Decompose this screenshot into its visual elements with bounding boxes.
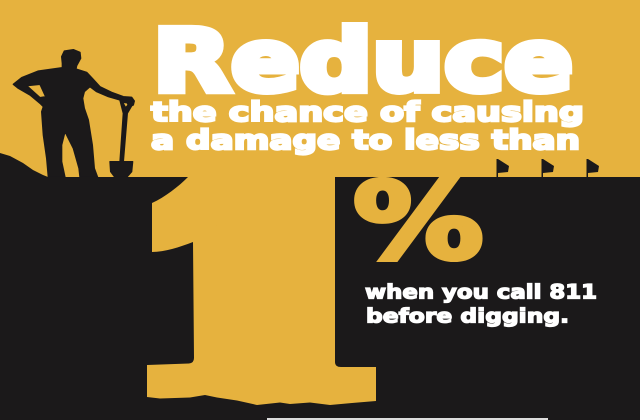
flag 1: [496, 159, 509, 177]
subtitle line 1: the chance of causing: [151, 97, 584, 128]
worker body: [13, 50, 134, 177]
worker silhouette with shovel: [13, 50, 134, 177]
flag 2: [542, 159, 554, 177]
caption line 1: when you call 811: [365, 280, 597, 303]
subtitle line 2: a damage to less than: [151, 125, 580, 156]
caption line 2: before digging.: [366, 304, 569, 327]
percent sign: %: [353, 161, 484, 284]
dark ground with cut-out of the number 1: [0, 153, 640, 420]
bottom light strip: [267, 418, 548, 420]
big number 1: 1: [190, 180, 329, 413]
flags: [496, 159, 599, 177]
flag 3: [586, 159, 599, 177]
shovel: [110, 100, 133, 177]
title: Reduce: Reduce: [153, 12, 573, 112]
